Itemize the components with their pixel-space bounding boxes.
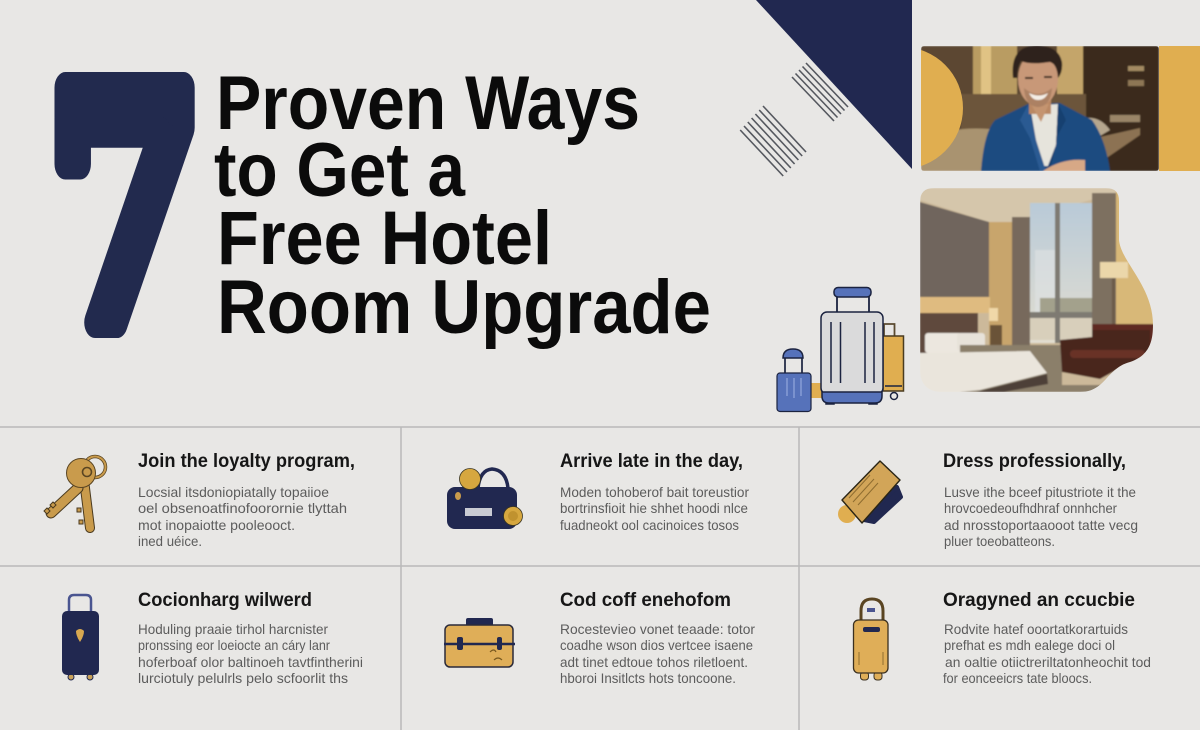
jacket: [981, 103, 1110, 171]
body text: [943, 621, 1151, 686]
body text: hboroi Insitlcts hots toncoone.: [560, 670, 736, 686]
divider lines: [0, 427, 1200, 730]
body text: [560, 621, 755, 686]
body text: [944, 484, 1138, 549]
body text: prefhat es mdh ealege doci ol: [944, 637, 1115, 653]
panel: arrive late in the day: [447, 451, 749, 533]
body text: lurciotuly pelulrls pelo scfoorlit ths: [138, 670, 348, 686]
diagonal stripes lower: [740, 106, 806, 176]
body text: adt tinet edtoue tohos riletloent.: [560, 654, 748, 670]
body text: pluer toeobatteons.: [944, 533, 1055, 549]
large silver suitcase: [821, 288, 904, 404]
icon: gold luggage: [854, 599, 888, 680]
body text: Lusve ithe bceef pitustriote it the: [944, 484, 1136, 500]
heading: Dress professionally,: [943, 451, 1126, 472]
diagonal stripes upper: [792, 63, 848, 121]
icon: keys: [44, 456, 106, 528]
body text: [560, 484, 749, 533]
photo: smiling man in blue blazer: [921, 46, 1200, 171]
body text: Locsial itsdoniopiatally topaiioe: [138, 484, 329, 500]
heading: Arrive late in the day,: [560, 451, 743, 472]
title: Free Hotel: [217, 196, 552, 281]
small blue suitcase: [777, 349, 811, 412]
navy triangle: [756, 0, 912, 169]
body text: for eonceeicrs tate bloocs.: [943, 670, 1092, 686]
body text: [138, 621, 363, 686]
gold circle overlay: [921, 50, 963, 166]
icon: navy suitcase: [62, 595, 99, 680]
luggage group: [777, 288, 904, 412]
title: Proven Ways: [216, 61, 640, 146]
body text: coadhe wson dios vertcee isaene: [560, 637, 753, 653]
panel: cocionharg wilwerd: [62, 590, 363, 686]
body text: fuadneokt ool cacinoices tosos: [560, 517, 739, 533]
heading: Cod coff enehofom: [560, 590, 731, 611]
body text: hrovcoedeoufhdhraf onnhcher: [944, 500, 1117, 516]
body text: Rocestevieo vonet teaade: totor: [560, 621, 755, 637]
body text: mot inopaiotte pooleooct.: [138, 517, 295, 533]
body text: bortrinsfioit hie shhet hoodi nlce: [560, 500, 748, 516]
large numeral 7: 7: [48, 21, 202, 399]
connector: [810, 383, 822, 398]
body text: ined uéice.: [138, 533, 202, 549]
panel: cod coff enehofom: [444, 590, 755, 686]
heading: Cocionharg wilwerd: [138, 590, 312, 611]
body text: ad nrosstoportaaooot tatte vecg: [944, 517, 1138, 533]
body text: oel obsenoatfinofoorornie tlyttah: [138, 500, 347, 516]
body text: an oaltie otiictreriltatonheochit tod: [945, 654, 1151, 670]
heading: Join the loyalty program,: [138, 451, 355, 472]
icon: bag with coins: [447, 468, 522, 529]
icon: gold case: [444, 618, 515, 667]
panel: dress professionally: [838, 451, 1138, 549]
title: Room Upgrade: [217, 265, 711, 350]
body text: hoferboaf olor baltinoeh tavtfintherini: [138, 654, 363, 670]
icon: credit cards: [838, 461, 901, 523]
body text: [138, 484, 347, 549]
photo: hotel room: [920, 188, 1160, 392]
panel: join the loyalty program: [44, 451, 355, 549]
title: [214, 61, 711, 350]
body text: pronssing eor loeiocte an cáry lanr: [138, 637, 330, 653]
body text: Hoduling praaie tirhol harcnister: [138, 621, 328, 637]
body text: Moden tohoberof bait toreustior: [560, 484, 749, 500]
panel: oragyned an ccucbie: [854, 590, 1151, 686]
title: to Get a: [214, 128, 466, 213]
heading: Oragyned an ccucbie: [943, 590, 1135, 611]
body text: Rodvite hatef ooortatkorartuids: [944, 621, 1128, 637]
